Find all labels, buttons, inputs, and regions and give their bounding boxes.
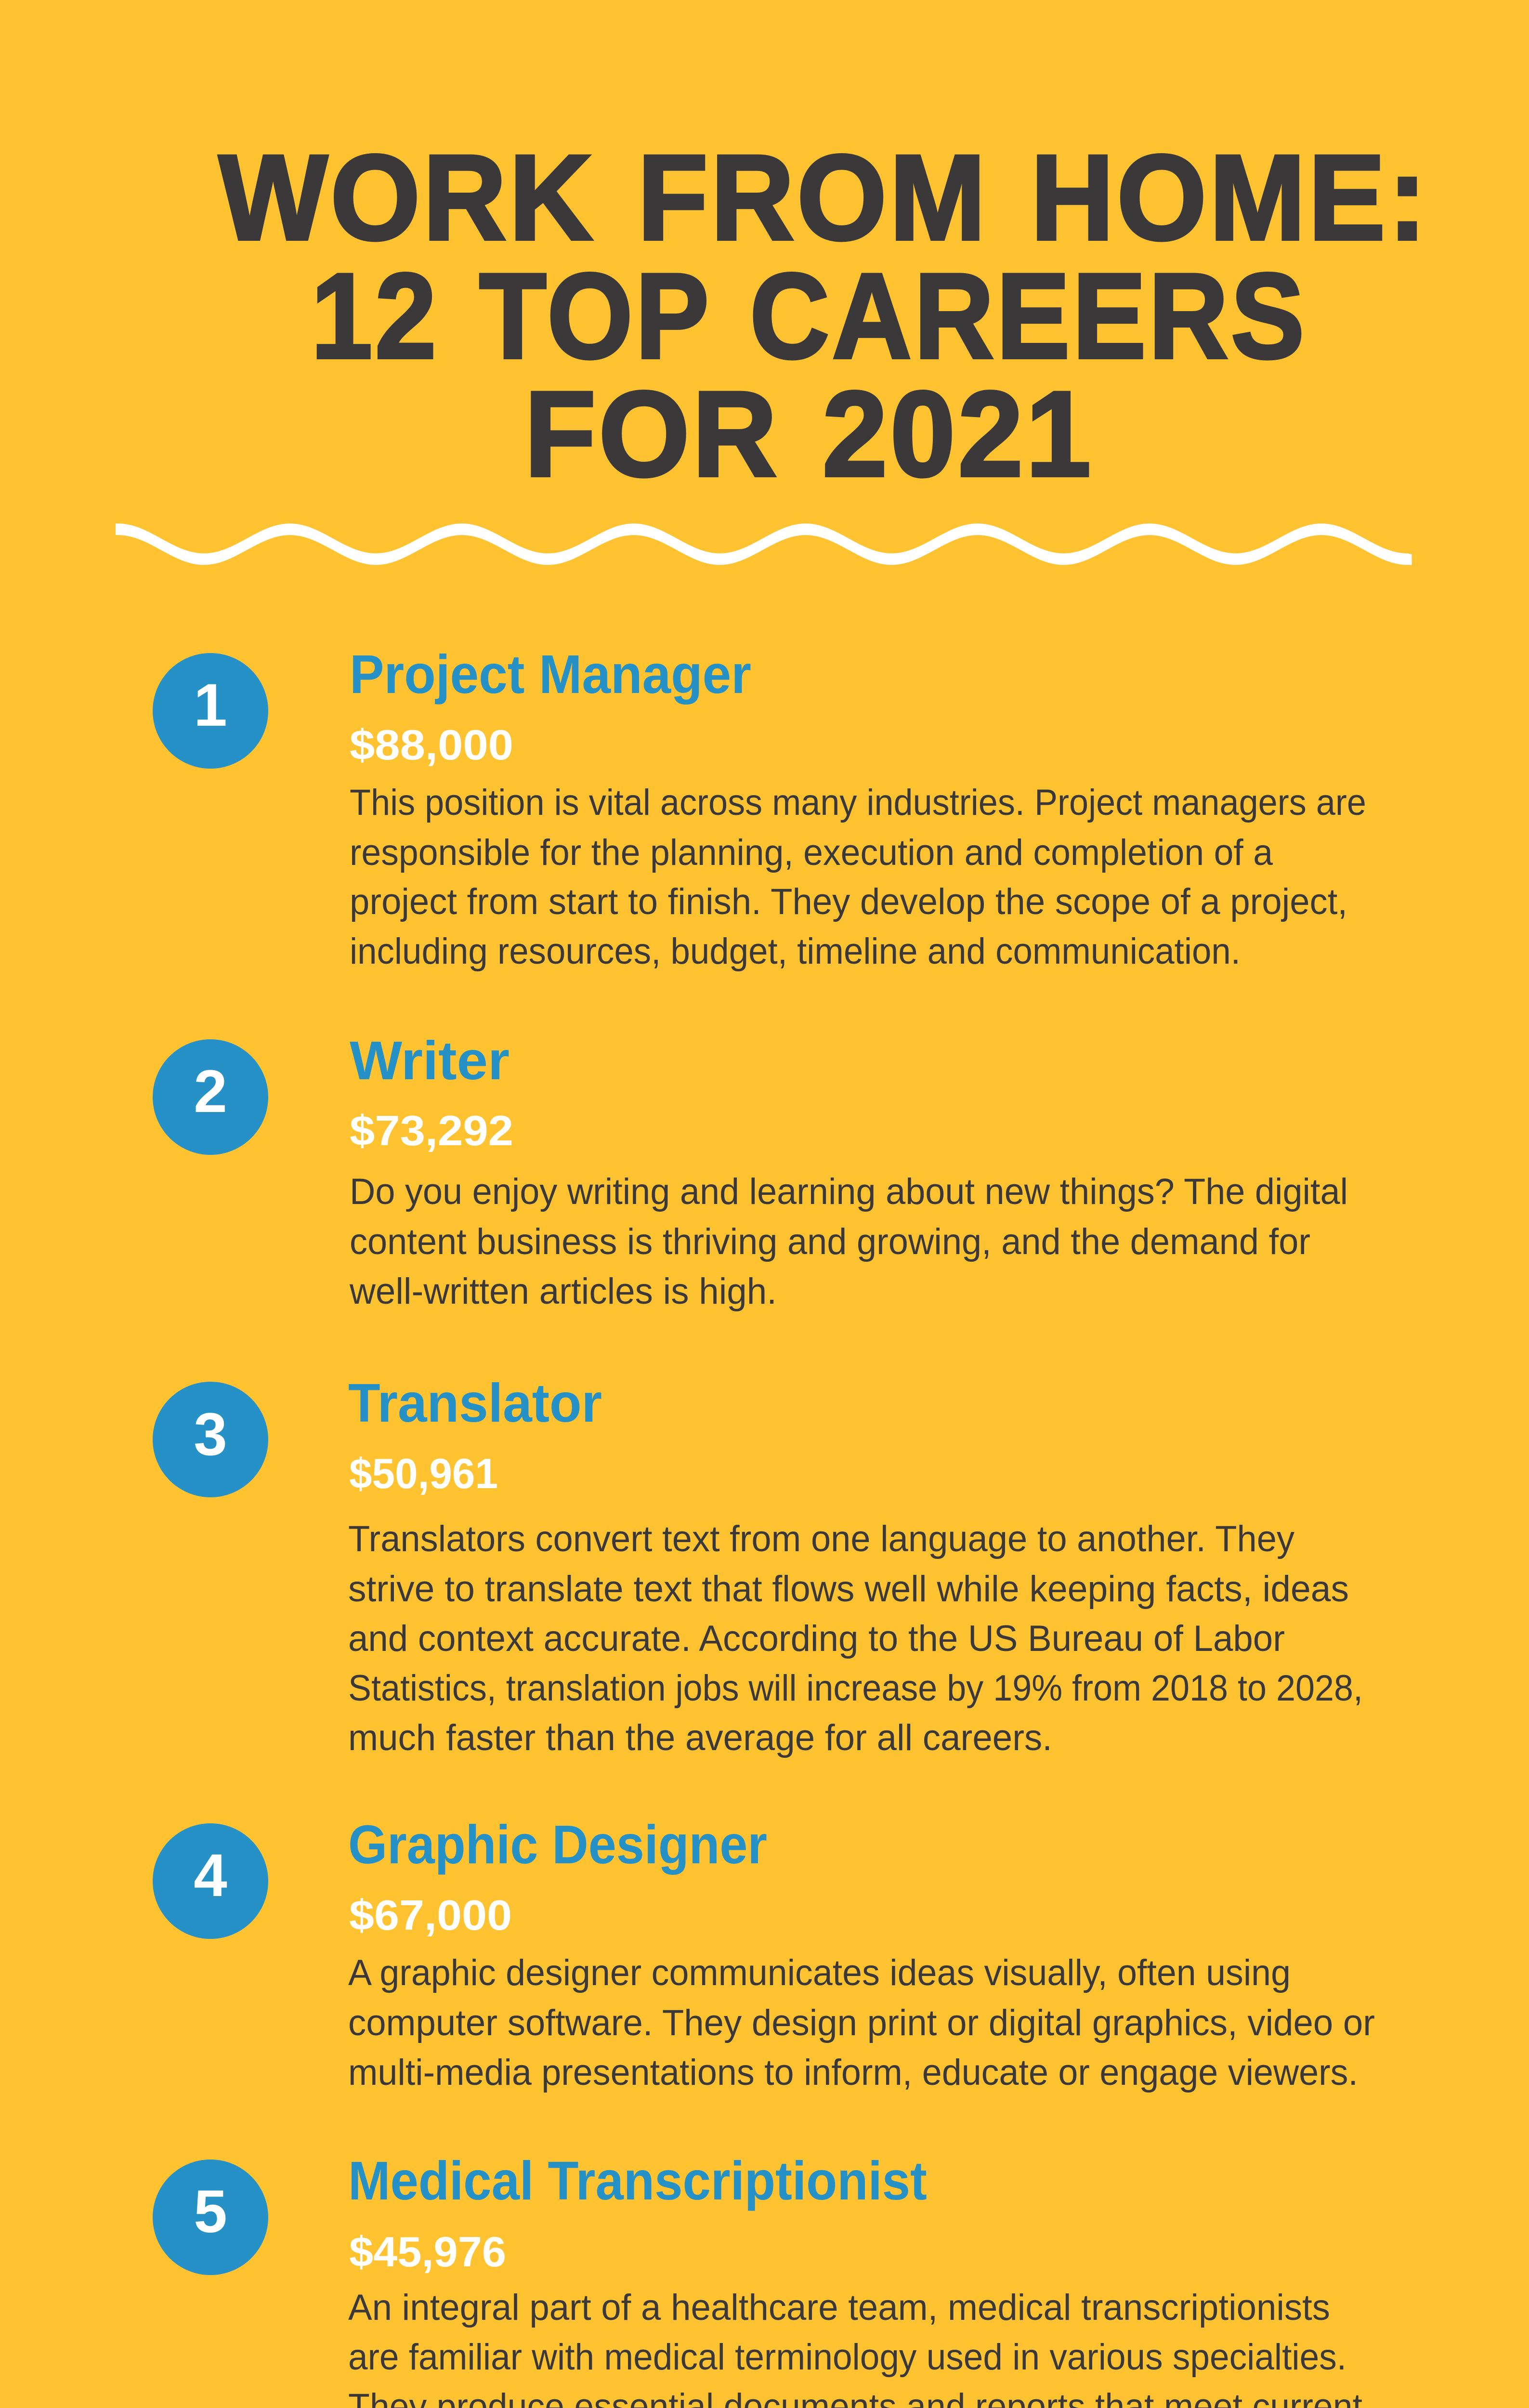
panel: career 4 graphic designer [153, 1814, 1375, 2093]
description [350, 782, 1366, 972]
heading: graphic designer: Graphic Designer [348, 1814, 767, 1875]
description: including resources, budget, timeline and communication. [350, 931, 1241, 972]
number badge 4: 4 [194, 1842, 227, 1909]
description: responsible for the planning, execution and completion of a [350, 832, 1273, 873]
description: An integral part of a healthcare team, medical transcriptionists [348, 2287, 1330, 2328]
panel: career 2 writer [153, 1030, 1348, 1312]
number badge 1: 1 [194, 672, 227, 739]
number badge 2 [153, 1039, 268, 1155]
title: FOR 2021 [524, 366, 1094, 502]
number badge 4 [153, 1823, 268, 1939]
number badge 5 [153, 2159, 268, 2275]
number badge 3 [153, 1382, 268, 1497]
panel: career 5 medical transcriptionist [153, 2150, 1362, 2408]
panel: career 3 translator [153, 1373, 1363, 1758]
description [349, 1171, 1348, 1312]
description: well-written articles is high. [349, 1271, 777, 1312]
heading: translator: Translator [348, 1373, 602, 1433]
heading: medical transcriptionist: Medical Transcriptionist [348, 2150, 927, 2211]
description: Translators convert text from one language to another. They [348, 1518, 1294, 1559]
description [348, 1518, 1363, 1758]
description: multi-media presentations to inform, educate or engage viewers. [348, 2052, 1358, 2093]
salary: $50,961 [349, 1450, 498, 1497]
description: This position is vital across many industries. Project managers are [350, 782, 1366, 823]
salary: $45,976 [349, 2228, 506, 2276]
salary: $88,000 [350, 721, 513, 769]
description: Statistics, translation jobs will increase by 19% from 2018 to 2028, [348, 1668, 1363, 1709]
number badge 1 [153, 653, 268, 769]
description: Do you enjoy writing and learning about new things? The digital [350, 1171, 1348, 1212]
description: strive to translate text that flows well while keeping facts, ideas [348, 1569, 1349, 1610]
wavy divider [116, 523, 1412, 565]
salary: $67,000 [349, 1891, 512, 1939]
title: WORK FROM HOME: [219, 130, 1429, 265]
salary: $73,292 [350, 1107, 513, 1154]
number badge 2: 2 [194, 1058, 227, 1125]
description: content business is thriving and growing, and the demand for [350, 1221, 1310, 1262]
heading: project manager: Project Manager [350, 644, 751, 705]
description: computer software. They design print or digital graphics, video or [348, 2002, 1375, 2043]
description: project from start to finish. They develop the scope of a project, [350, 881, 1347, 922]
panel: career 1 project manager [153, 644, 1366, 972]
number badge 5: 5 [194, 2178, 227, 2245]
description: much faster than the average for all careers. [348, 1717, 1052, 1758]
description: and context accurate. According to the US Bureau of Labor [348, 1618, 1285, 1659]
description: A graphic designer communicates ideas visually, often using [348, 1952, 1291, 1993]
number badge 3: 3 [194, 1401, 227, 1468]
description: are familiar with medical terminology used in various specialties. [348, 2337, 1346, 2378]
title [219, 130, 1429, 502]
heading: writer: Writer [350, 1030, 510, 1091]
title: 12 TOP CAREERS [311, 249, 1307, 384]
description [348, 1952, 1375, 2093]
description [348, 2287, 1362, 2408]
